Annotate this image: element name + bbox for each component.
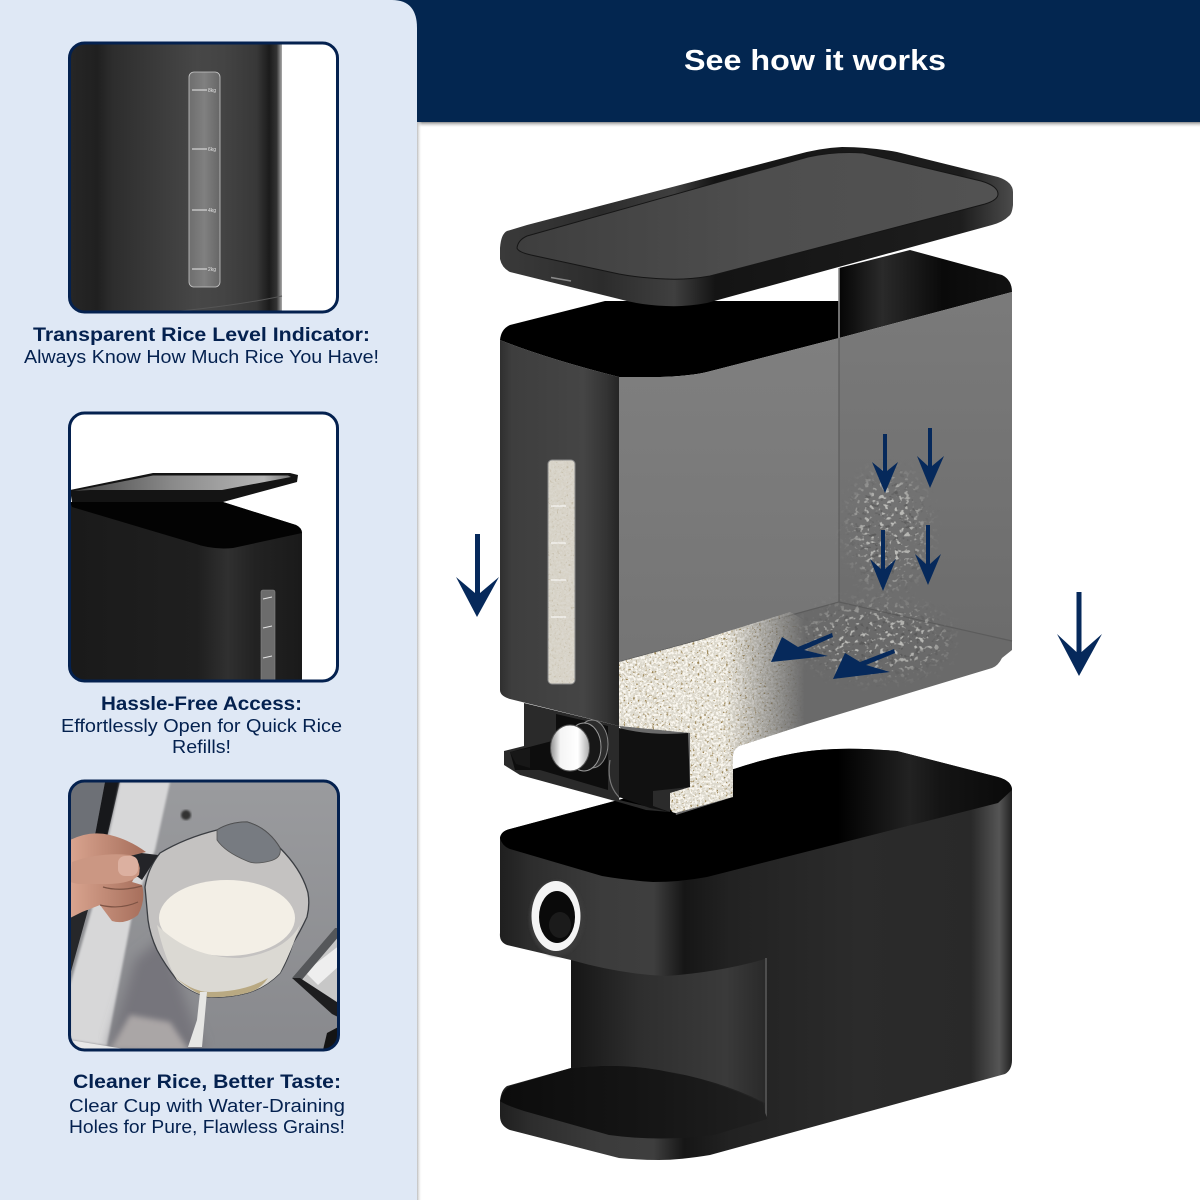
cutaway wall left of centre xyxy=(619,338,839,662)
sparse falling rice xyxy=(798,468,954,684)
caption: hassle-free access xyxy=(61,694,342,757)
hopper cutaway xyxy=(500,250,1012,815)
base unit xyxy=(500,749,1012,1160)
rice level gauge: 4kg xyxy=(208,208,216,214)
arrow: rice flow down 2 xyxy=(917,428,944,488)
spout assembly xyxy=(504,703,670,812)
caption: rice level indicator xyxy=(24,325,379,367)
panel: hassle-free access xyxy=(68,413,338,685)
lid xyxy=(500,147,1013,306)
caption: rice level indicator: Transparent Rice Level Indicator: xyxy=(33,325,370,346)
caption: cleaner rice xyxy=(69,1072,345,1137)
arrow: right downward xyxy=(1057,592,1102,676)
base interior xyxy=(500,749,1012,882)
caption: cleaner rice: Clear Cup with Water-Draining xyxy=(69,1096,345,1116)
base foot plate xyxy=(500,1066,767,1138)
dispense hole ring xyxy=(529,880,585,956)
hopper interior xyxy=(500,301,839,377)
piled rice cross-section xyxy=(619,612,800,813)
rice level gauge: 8kg xyxy=(208,88,216,94)
left sidebar panel xyxy=(0,0,422,1200)
cutaway wall right of centre xyxy=(839,292,1012,641)
caption: cleaner rice: Cleaner Rice, Better Taste: xyxy=(73,1072,341,1093)
hopper floor xyxy=(619,602,1012,815)
water stream xyxy=(188,992,207,1047)
panel: rice level indicator xyxy=(68,42,338,314)
caption: rice level indicator: Always Know How Much Rice You Have! xyxy=(24,347,379,367)
measuring cup xyxy=(117,822,309,1047)
metal tool at lower right xyxy=(292,928,340,1050)
rice window xyxy=(548,460,575,684)
lid top surface xyxy=(517,152,998,279)
caption: hassle-free access: Hassle-Free Access: xyxy=(101,694,302,715)
photo: hand holding draining cup of rice xyxy=(68,780,340,1052)
cup handle xyxy=(131,853,158,880)
rice level gauge: 6kg xyxy=(208,147,216,153)
panel: cleaner rice photo xyxy=(68,780,340,1052)
heading: see how it works: See how it works xyxy=(684,45,946,77)
arrow: rice flow down 3 xyxy=(870,530,896,591)
rice level gauge xyxy=(189,72,220,287)
spout bracket xyxy=(619,728,690,812)
arrow: left downward xyxy=(456,534,499,617)
caption: hassle-free access: Effortlessly Open for Quick Rice xyxy=(61,716,342,736)
left side wall xyxy=(500,340,619,726)
arrow: rice flow diagonal 2 xyxy=(833,649,895,679)
base column recess xyxy=(571,959,765,1103)
caption: hassle-free access: Refills! xyxy=(172,737,231,757)
photo: dispenser with lid ajar xyxy=(68,473,302,685)
arrow: rice flow diagonal 1 xyxy=(771,633,833,662)
arrow: rice flow down 4 xyxy=(915,525,941,585)
header band xyxy=(380,0,1200,128)
arrow: rice flow down 1 xyxy=(872,434,898,493)
photo: dispenser side with gauge xyxy=(68,42,282,314)
caption: cleaner rice: Holes for Pure, Flawless Grains! xyxy=(69,1117,345,1137)
metal knob xyxy=(550,725,590,771)
rice level gauge: 2kg xyxy=(208,267,216,273)
hand xyxy=(70,833,146,922)
